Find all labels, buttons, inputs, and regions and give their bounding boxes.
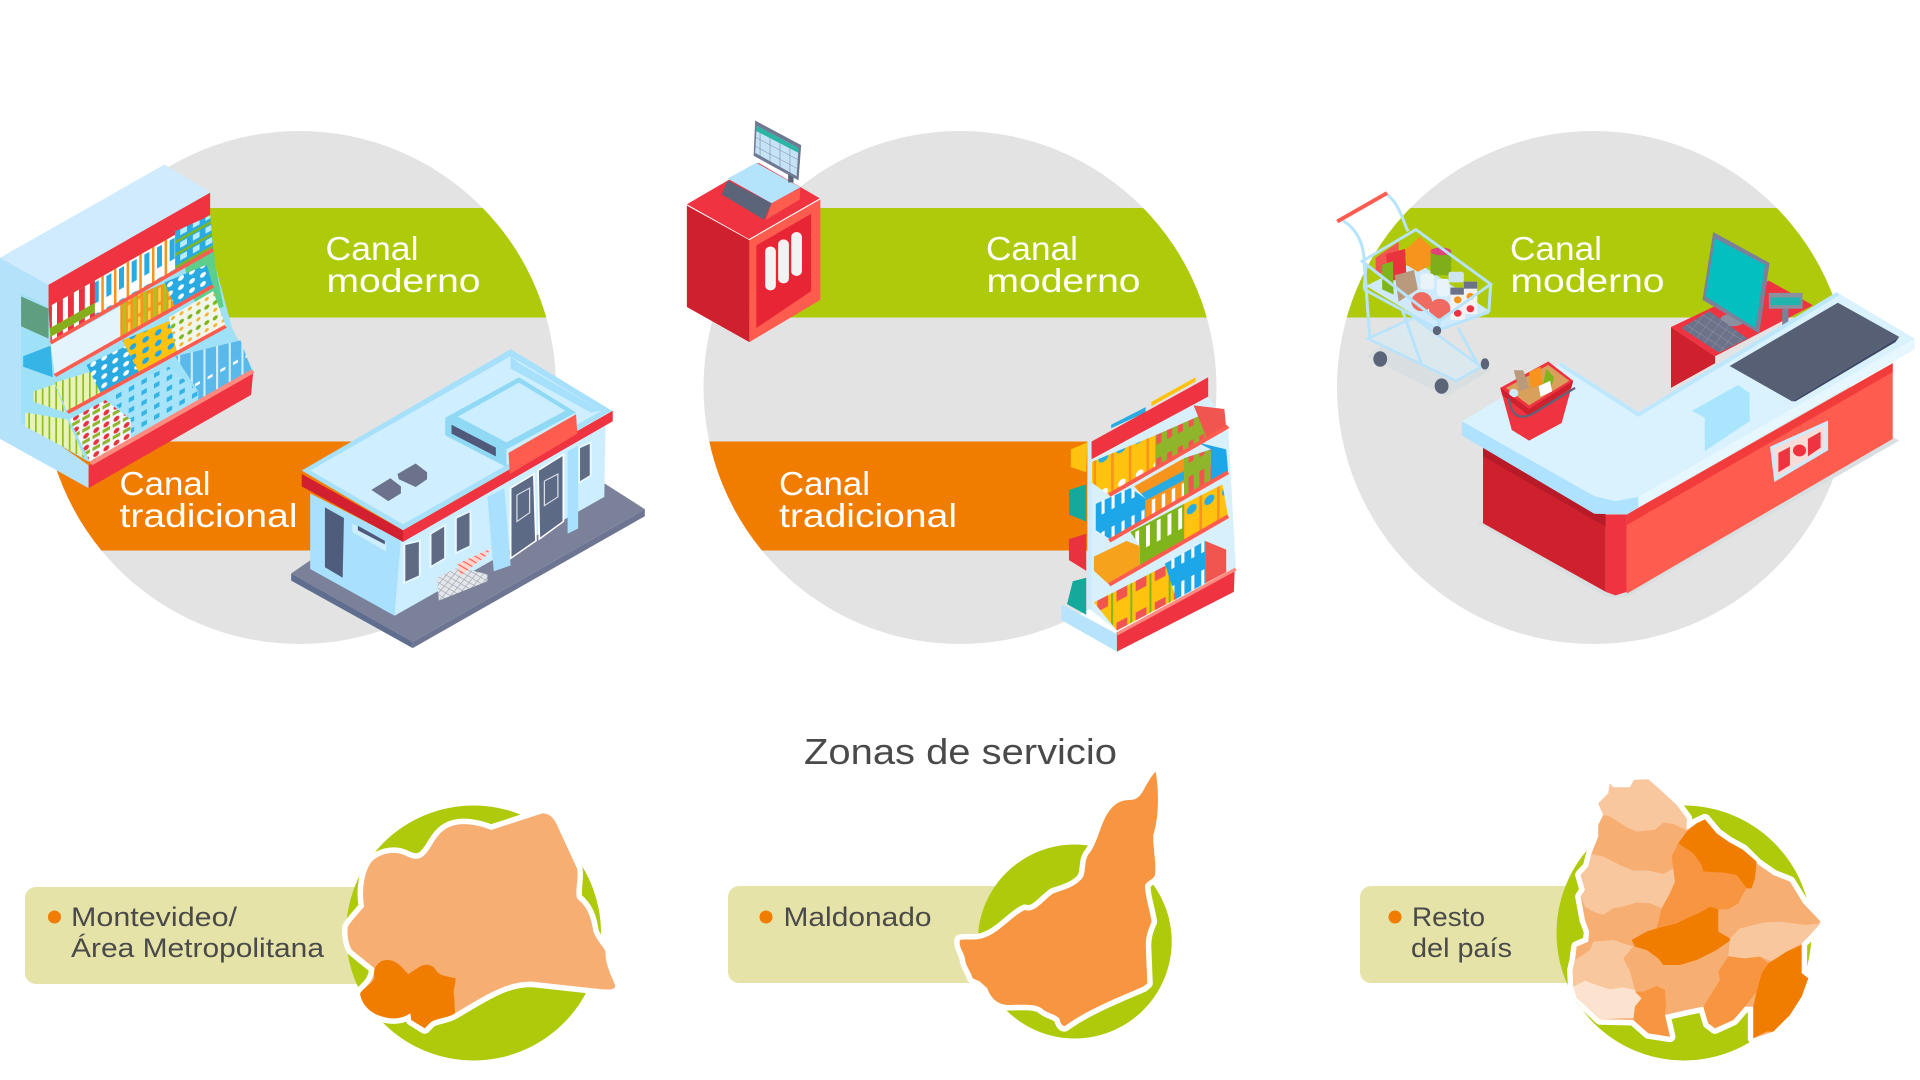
map: Montevideo area bbox=[348, 813, 615, 1028]
panel: channel circle 2 bbox=[687, 121, 1236, 652]
map: Uruguay departments bbox=[1573, 779, 1821, 1038]
label: canal tradicional 2: tradicional bbox=[779, 497, 957, 534]
icon: gondola shelf bbox=[1061, 377, 1236, 652]
map: Maldonado bbox=[960, 772, 1158, 1026]
label: canal moderno 1: Canal bbox=[326, 230, 418, 267]
icon: store building bbox=[291, 349, 645, 648]
panel: zone Resto del país bbox=[1360, 779, 1821, 1060]
icon: red kiosk with scale bbox=[687, 121, 820, 342]
band: canal moderno 2 bbox=[749, 208, 1207, 318]
label: canal moderno 3: moderno bbox=[1510, 262, 1664, 299]
label: canal tradicional 2: Canal bbox=[779, 465, 870, 502]
grey circle 2 bbox=[704, 131, 1216, 644]
label: canal moderno 3: Canal bbox=[1510, 230, 1602, 267]
title: zonas de servicio: Zonas de servicio bbox=[804, 731, 1117, 772]
label: Maldonado: Maldonado bbox=[784, 902, 932, 932]
band: canal moderno 3 bbox=[1330, 208, 1860, 318]
label: Resto del país: Resto bbox=[1412, 902, 1485, 932]
icon: shopping cart bbox=[1337, 193, 1491, 397]
icon: monitor on red desk bbox=[1671, 232, 1813, 388]
panel: channel circle 3 bbox=[1330, 131, 1915, 644]
marker dot Montevideo bbox=[48, 910, 61, 924]
band: canal moderno 1 bbox=[40, 208, 560, 318]
label: Montevideo: Montevideo/ bbox=[71, 902, 238, 932]
band: canal tradicional 1 bbox=[56, 442, 510, 550]
green circle Maldonado bbox=[978, 844, 1172, 1038]
label: Resto del país: del país bbox=[1411, 933, 1512, 963]
marker dot Maldonado bbox=[760, 910, 772, 924]
panel: zone Montevideo bbox=[25, 806, 615, 1060]
label: canal moderno 2: Canal bbox=[986, 230, 1078, 267]
grey circle 3 bbox=[1337, 131, 1850, 644]
green circle Resto del país bbox=[1556, 806, 1812, 1060]
label: canal moderno 1: moderno bbox=[326, 262, 480, 299]
panel: zone Maldonado bbox=[728, 772, 1172, 1038]
icon: refrigerated display shelf bbox=[0, 165, 253, 488]
label: canal tradicional 1: tradicional bbox=[120, 497, 298, 534]
grey circle 1 bbox=[43, 131, 556, 644]
icon: shopping basket bbox=[1500, 361, 1575, 441]
green circle Montevideo bbox=[346, 806, 601, 1060]
label: canal tradicional 1: Canal bbox=[120, 465, 210, 502]
label: Montevideo: Área Metropolitana bbox=[71, 933, 325, 963]
card: Resto del país bbox=[1360, 886, 1600, 983]
label: canal moderno 2: moderno bbox=[986, 262, 1140, 299]
panel: channel circle 1 bbox=[0, 131, 645, 648]
card: Maldonado bbox=[728, 886, 1018, 983]
card: Montevideo bbox=[25, 887, 370, 984]
icon: checkout counter bbox=[1462, 293, 1915, 597]
marker dot Resto del país bbox=[1388, 910, 1402, 924]
band: canal tradicional 2 bbox=[709, 442, 1124, 550]
